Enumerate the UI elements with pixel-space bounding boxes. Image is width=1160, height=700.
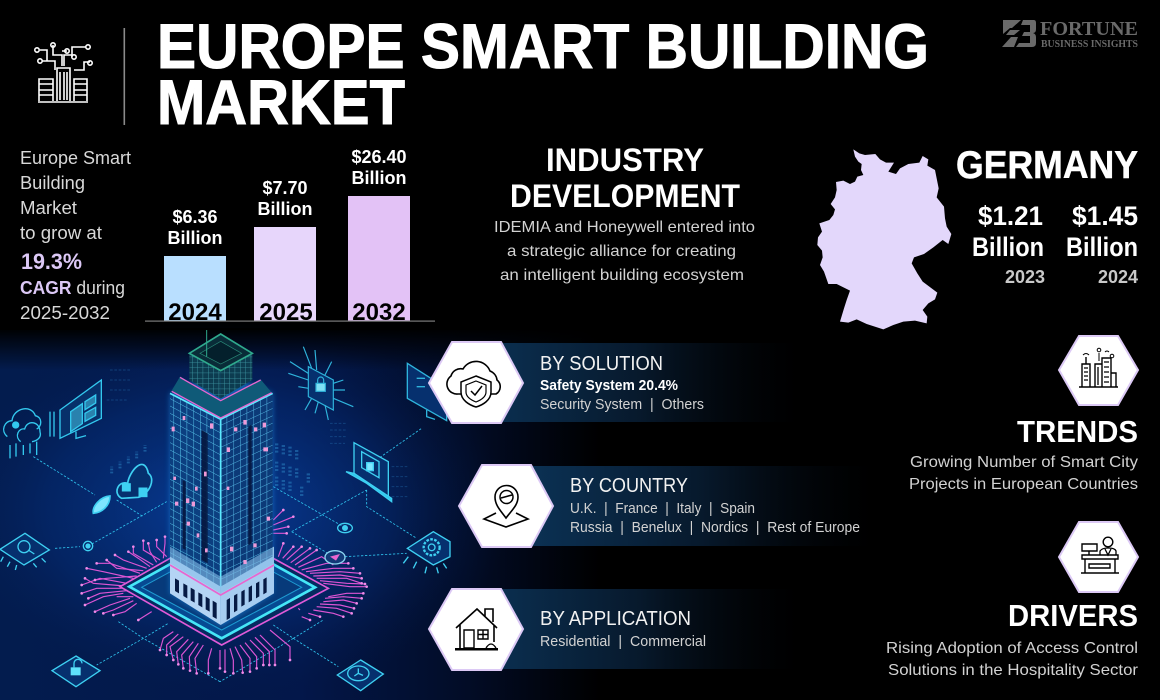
icon: search chip <box>0 533 93 570</box>
panel: by application: Residential | Commercial <box>540 633 706 650</box>
CAGR text block: 19.3% <box>21 249 82 274</box>
illustration: smart building tower on circuit board <box>0 330 450 691</box>
bar 2032: 2032 <box>352 299 406 326</box>
bar chart: market size <box>145 147 435 326</box>
bar 2032: $26.40 <box>351 147 407 167</box>
title: EUROPE SMART BUILDING <box>157 12 929 82</box>
icon: smart city <box>1059 336 1138 405</box>
panel: by solution <box>429 342 800 423</box>
panel: by country <box>459 465 875 547</box>
industry development: INDUSTRY <box>546 142 704 178</box>
tower base <box>170 547 274 625</box>
tower shaft <box>170 393 274 593</box>
icon: open lock tile <box>52 656 100 687</box>
CAGR text block <box>20 147 131 323</box>
bar 2032: Billion <box>352 168 406 188</box>
industry development: IDEMIA and Honeywell entered into <box>494 219 755 236</box>
CAGR text block: CAGR during <box>20 277 125 298</box>
panel: by application <box>429 589 800 670</box>
icon: laptop lock <box>346 443 392 502</box>
stat 2024: Billion <box>1066 232 1138 262</box>
stat 2024: 2024 <box>1098 267 1138 287</box>
panel: drivers: Solutions in the Hospitality Sector <box>888 662 1139 679</box>
panel: by country: Russia | Benelux | Nordics | Rest of Europe <box>570 519 860 536</box>
Germany stats: GERMANY <box>956 144 1138 187</box>
pink circuit traces <box>82 510 367 673</box>
industry development: an intelligent building ecosystem <box>500 267 744 284</box>
panel: by solution: BY SOLUTION <box>540 353 663 375</box>
stat 2023: $1.21 <box>978 201 1043 231</box>
CAGR text block: to grow at <box>20 222 102 243</box>
header icon: smart city circuit <box>35 43 92 102</box>
logo: Fortune Business Insights: FORTUNE <box>1040 18 1138 40</box>
stat 2023: Billion <box>972 232 1044 262</box>
panel: trends <box>909 336 1138 493</box>
bar 2025: $7.70 <box>262 178 308 198</box>
panel: drivers <box>886 522 1139 679</box>
header divider <box>124 28 125 125</box>
icon: map pin <box>459 465 553 547</box>
industry development <box>494 142 755 284</box>
panel: by country: BY COUNTRY <box>570 475 688 497</box>
CAGR text block: 2025-2032 <box>20 302 110 323</box>
panel: by solution: Security System | Others <box>540 396 704 413</box>
icon: house <box>429 589 523 670</box>
stat 2024 <box>1066 201 1138 287</box>
title <box>157 12 929 138</box>
industry development: DEVELOPMENT <box>510 178 740 214</box>
icon: processor lock <box>288 347 353 420</box>
icon: right monitor <box>407 363 447 421</box>
faint data columns <box>107 370 408 497</box>
panel: trends: Projects in European Countries <box>909 476 1138 493</box>
CAGR text block: Building <box>20 172 85 193</box>
bar 2024: Billion <box>168 228 222 248</box>
map: Germany <box>817 149 951 329</box>
tower glow <box>170 370 273 627</box>
icon: heart node <box>325 523 352 564</box>
title: MARKET <box>157 68 405 138</box>
bar 2024: $6.36 <box>172 207 218 227</box>
bar 2024: 2024 <box>168 299 222 326</box>
stat 2023 <box>972 201 1045 287</box>
panel: drivers: Rising Adoption of Access Control <box>886 640 1138 657</box>
industry development: a strategic alliance for creating <box>507 243 736 260</box>
stat 2023: 2023 <box>1005 267 1045 287</box>
tower crown <box>172 330 272 418</box>
panel: by solution: Safety System 20.4% <box>540 378 678 394</box>
icon: clock tile <box>337 660 383 691</box>
bar 2025: 2025 <box>259 299 313 326</box>
CAGR text block: Market <box>20 197 77 218</box>
trace end dots <box>82 510 367 673</box>
panel: trends: TRENDS <box>1017 414 1138 449</box>
icon: reception desk <box>1059 522 1138 592</box>
icon: cloud shield <box>429 342 523 423</box>
Germany stats <box>956 144 1138 287</box>
bar 2032 <box>348 147 410 326</box>
panel: trends: Growing Number of Smart City <box>910 454 1138 471</box>
bar 2025: Billion <box>258 199 312 219</box>
panel: by country: U.K. | France | Italy | Spain <box>570 500 755 517</box>
bar 2025 <box>254 178 316 326</box>
icon: gear chip <box>403 532 450 573</box>
icon: clouds and monitor <box>4 380 101 458</box>
bar 2024 <box>164 207 226 326</box>
icon: cloud lock <box>93 464 152 513</box>
background glow: circuit scene <box>0 300 600 700</box>
logo: Fortune Business Insights: BUSINESS INSIGHTS <box>1041 39 1138 50</box>
stat 2024: $1.45 <box>1072 201 1138 231</box>
logo: Fortune Business Insights <box>1002 18 1138 50</box>
platform <box>120 558 328 645</box>
panel: drivers: DRIVERS <box>1008 598 1138 633</box>
panel: by application: BY APPLICATION <box>540 608 691 630</box>
CAGR text block: Europe Smart <box>20 147 131 168</box>
dashed network lines <box>33 428 422 682</box>
